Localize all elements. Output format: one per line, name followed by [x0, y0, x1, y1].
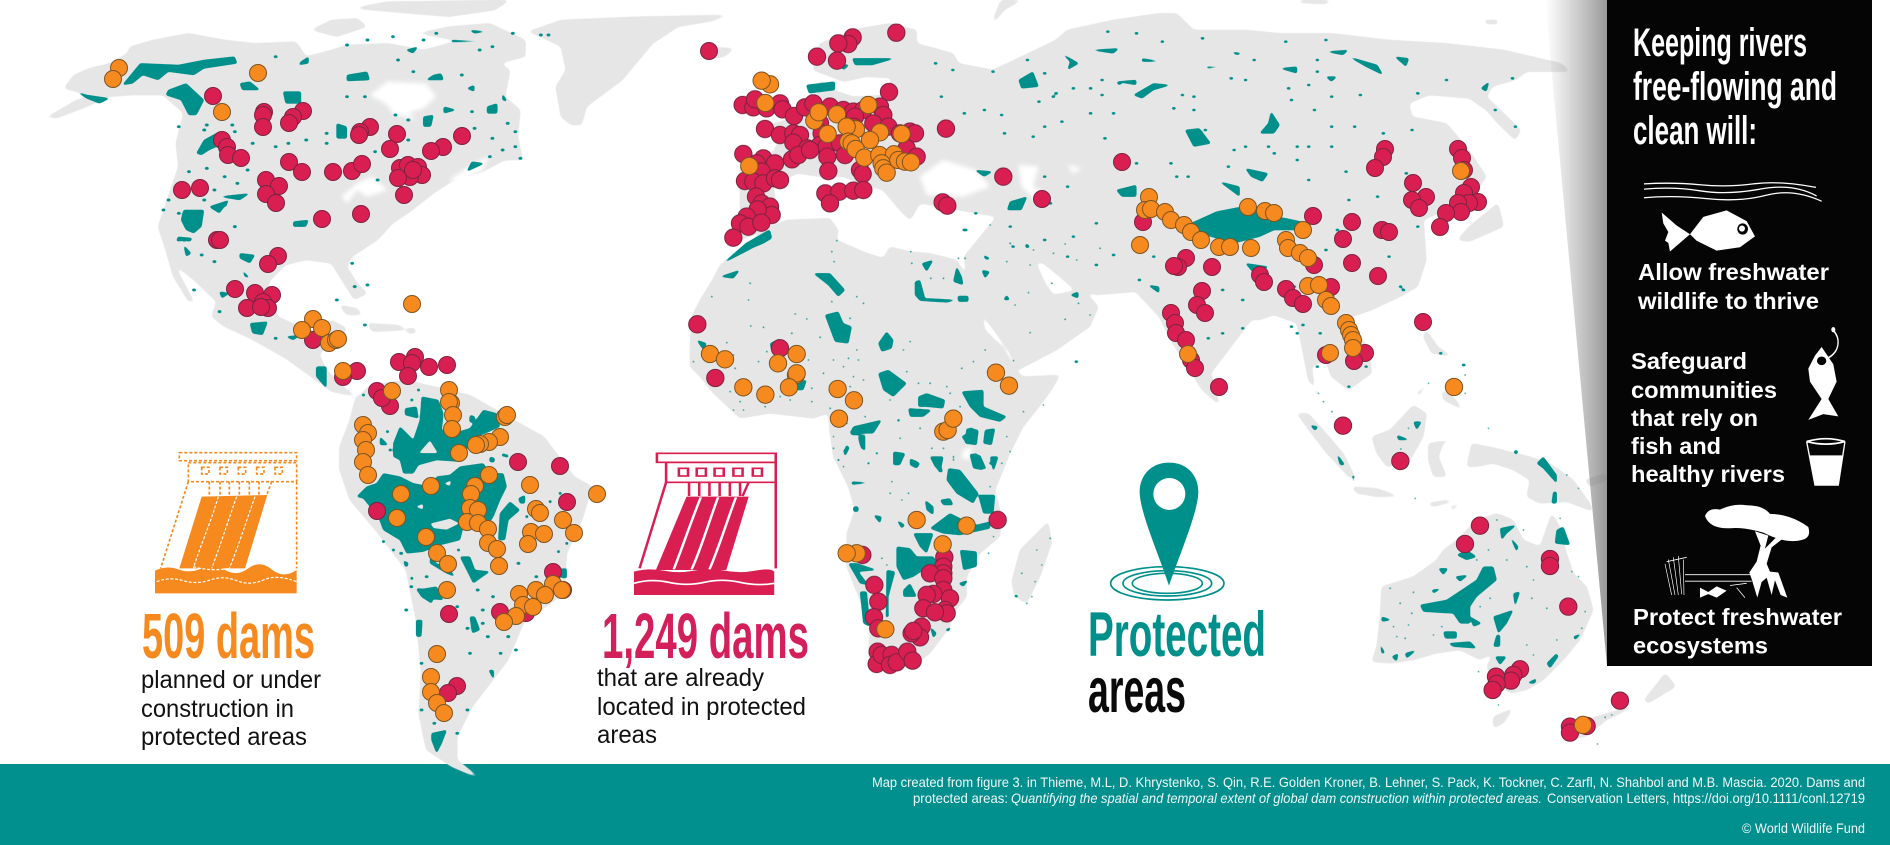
markers: southern Africa: [854, 511, 1006, 674]
panel: benefits: [1607, 0, 1872, 666]
stat: 509 dams: 509 dams: [142, 600, 315, 672]
markers: Europe: [725, 24, 1012, 246]
land: Americas north: [43, 0, 734, 397]
stat: 509 dams: protected areas: [141, 723, 307, 751]
source credit: Conservation Letters, https://doi.org/10.1111/conl.12719: [1547, 790, 1865, 806]
text: communities: fish and: [1631, 433, 1721, 459]
markers: Americas: [174, 42, 718, 702]
footer band: [0, 764, 1890, 845]
protected areas: Australasia: [1310, 365, 1612, 744]
markers: Australasia: [1445, 378, 1592, 734]
icon: tree and river: [1665, 505, 1809, 598]
source credit: protected areas:: [913, 790, 1008, 806]
land: Madagascar: [1012, 522, 1052, 603]
text: ecosystems: ecosystems: [1633, 632, 1768, 658]
protected areas: North America: [76, 30, 549, 388]
stat: 509 dams: construction in: [141, 695, 294, 723]
icon: glass of water: [1807, 439, 1845, 485]
panel heading: [1633, 21, 1837, 153]
protected areas: South America south: [401, 553, 537, 753]
text: wildlife: wildlife to thrive: [1637, 288, 1819, 314]
legend: protected areas: Protected: [1088, 600, 1266, 670]
protected areas: southern Africa: [833, 421, 1050, 638]
protected areas: Amazon basin: [357, 390, 567, 600]
land masses: [43, 0, 1676, 778]
legend: protected areas: areas: [1088, 656, 1186, 726]
text: communities: that rely on: [1631, 405, 1758, 431]
protected areas: Eurasia: [723, 32, 1516, 387]
text: ecosystems: [1633, 604, 1842, 658]
source credit: © World Wildlife Fund: [1742, 820, 1865, 836]
land: South-East Asia and Australia: [1297, 382, 1608, 728]
panel heading: clean will:: [1633, 109, 1757, 153]
text: communities: [1631, 348, 1785, 487]
land: New Zealand: [1564, 673, 1676, 740]
land: Africa: [690, 218, 1060, 670]
text: ecosystems: Protect freshwater: [1633, 604, 1842, 630]
protected areas: Africa and Arabia: [693, 225, 1100, 473]
land: Eurasia: [734, 0, 1570, 405]
text: wildlife: [1637, 259, 1829, 314]
legend: protected areas: [1088, 600, 1266, 726]
stat: 1,249 dams: located in protected: [597, 693, 806, 721]
markers: Africa: [689, 316, 789, 387]
icon: planned dam (dashed orange): [155, 453, 297, 593]
stat: 1,249 dams: [597, 600, 809, 749]
panel shadow: [1545, 0, 1607, 666]
stat: 1,249 dams: areas: [597, 721, 657, 749]
text: communities: healthy rivers: [1631, 461, 1785, 487]
text: wildlife: Allow freshwater: [1638, 259, 1829, 285]
icon: protected area pin: [1111, 463, 1224, 600]
text: communities: Safeguard: [1631, 348, 1747, 374]
icon: water lines: [1644, 183, 1822, 201]
icon: fish: [1662, 210, 1755, 252]
land: South America: [340, 380, 592, 778]
dam markers: existing dams (red): [174, 24, 1629, 741]
stat: 509 dams: [141, 600, 321, 751]
stat: 509 dams: planned or under: [141, 666, 321, 694]
markers: Asia: [1034, 140, 1486, 396]
text: communities: communities: [1631, 377, 1777, 403]
stat: 1,249 dams: 1,249 dams: [602, 600, 809, 672]
protected areas: [76, 30, 1612, 753]
markers: Africa: [701, 345, 1018, 440]
source credit: [872, 774, 1865, 836]
source credit: Quantifying the spatial and temporal extent of global dam construction within protected areas.: [1011, 790, 1542, 806]
icon: existing dam (red): [634, 453, 776, 595]
markers: Australasia: [1334, 417, 1629, 741]
world map: [43, 0, 1676, 778]
markers: Americas and Asia: [104, 60, 1470, 722]
stat: 1,249 dams: that are already: [597, 664, 764, 692]
markers: Europe: [741, 72, 920, 181]
dam markers: planned dams (orange): [104, 60, 1592, 734]
markers: southern Africa: [838, 511, 975, 638]
icon: fish on hook: [1808, 327, 1838, 420]
